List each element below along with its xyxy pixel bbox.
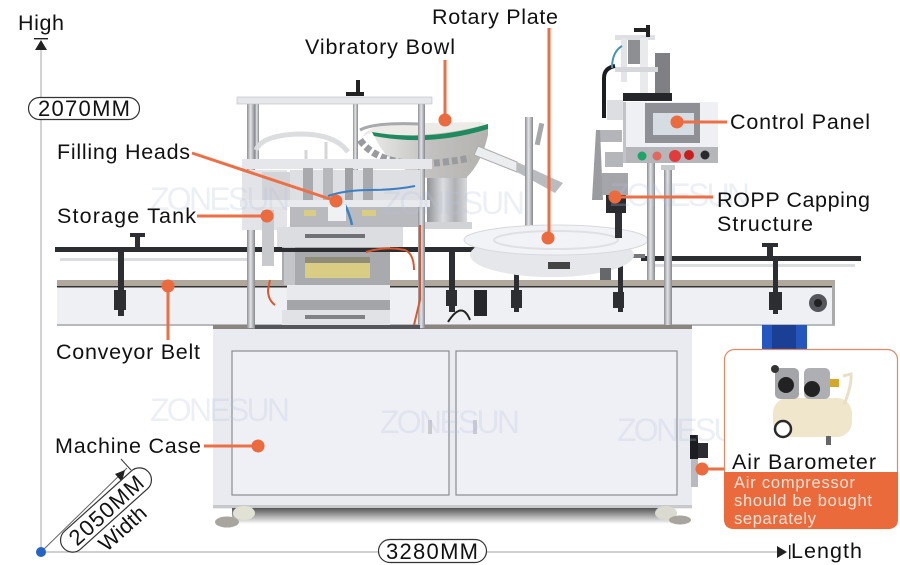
- pill: 3280MM: 3280MM: [386, 539, 478, 564]
- label: High: High: [18, 11, 64, 35]
- tubing: [328, 186, 415, 196]
- icon: right arrow: [777, 545, 790, 559]
- conveyor clamps: [114, 233, 782, 316]
- pill: 2050MM Width: [56, 463, 173, 565]
- compressor note: Air compressor: [734, 474, 856, 492]
- bowl chute: [474, 117, 563, 227]
- mid bracket shading: [290, 170, 420, 200]
- panel: air compressor: [724, 350, 898, 529]
- pill: 2070MM: 2070MM: [38, 96, 130, 121]
- callout: vibratory bowl: Vibratory Bowl: [305, 35, 455, 59]
- black connector block: [448, 290, 487, 322]
- capping head: [592, 25, 672, 280]
- pump assembly: [282, 247, 390, 285]
- machine case: [213, 325, 692, 509]
- compressor note: separately: [734, 510, 817, 528]
- watermarks: ZONESUN: [150, 181, 290, 217]
- label: Length: Length: [791, 539, 862, 563]
- callout: ROPP capping structure: ROPP Capping: [717, 188, 870, 212]
- callout: rotary plate: Rotary Plate: [432, 5, 558, 29]
- callout line: air barometer: [696, 462, 725, 476]
- columns: [247, 102, 255, 328]
- orange note box: [724, 472, 898, 529]
- icon: up arrow: [34, 38, 48, 50]
- callout: ROPP capping structure: Structure: [717, 212, 813, 236]
- conveyor belt: [57, 280, 835, 326]
- watermarks: ZONESUN: [382, 185, 525, 221]
- icon: width arrow: [115, 459, 131, 482]
- watermarks: [150, 177, 757, 448]
- dimension axes: [41, 46, 778, 552]
- piston cylinders: [303, 168, 313, 200]
- callout: rotary plate: [432, 5, 558, 244]
- watermarks: ZONESUN: [617, 412, 757, 448]
- base plate strip: [255, 325, 420, 329]
- pill: 2050MM Width: Width: [94, 501, 152, 556]
- callout: conveyor belt: [56, 280, 200, 364]
- case floor shadow: [232, 508, 672, 524]
- callout: control panel: Control Panel: [730, 110, 870, 134]
- watermarks: ZONESUN: [380, 404, 520, 440]
- callout: storage tank: Storage Tank: [57, 204, 196, 228]
- callout: storage tank: [57, 204, 274, 228]
- top bar: [237, 97, 432, 104]
- callout: machine case: Machine Case: [55, 434, 201, 458]
- callout: ROPP capping structure: [608, 188, 870, 236]
- conveyor guide rails: [55, 247, 861, 267]
- filling frame: [237, 80, 432, 329]
- callout: vibratory bowl: [305, 35, 455, 126]
- blue motor: [762, 325, 807, 349]
- case feet: [215, 506, 691, 528]
- panel column: [661, 165, 675, 325]
- machine illustration: [55, 25, 861, 528]
- hoses: [256, 134, 348, 152]
- compressor title: Air Barometer: [732, 450, 876, 474]
- plates: [242, 159, 432, 169]
- pill: 2050MM Width: 2050MM: [64, 470, 149, 550]
- rotary plate: [464, 225, 648, 280]
- origin dot: [36, 547, 46, 557]
- watermarks: ZONESUN: [610, 177, 750, 213]
- compressor note: [734, 474, 872, 528]
- watermarks: ZONESUN: [150, 392, 290, 428]
- callout: filling heads: [57, 140, 342, 208]
- callout: conveyor belt: Conveyor Belt: [56, 340, 200, 364]
- callout: machine case: [55, 434, 264, 458]
- control panel: [623, 102, 718, 163]
- storage tank: [242, 170, 287, 230]
- compressor note: should be bought: [734, 492, 872, 510]
- air regulator: [690, 435, 708, 487]
- vibratory bowl: [360, 122, 488, 229]
- icon: air compressor: [771, 365, 852, 445]
- callout: filling heads: Filling Heads: [57, 140, 190, 164]
